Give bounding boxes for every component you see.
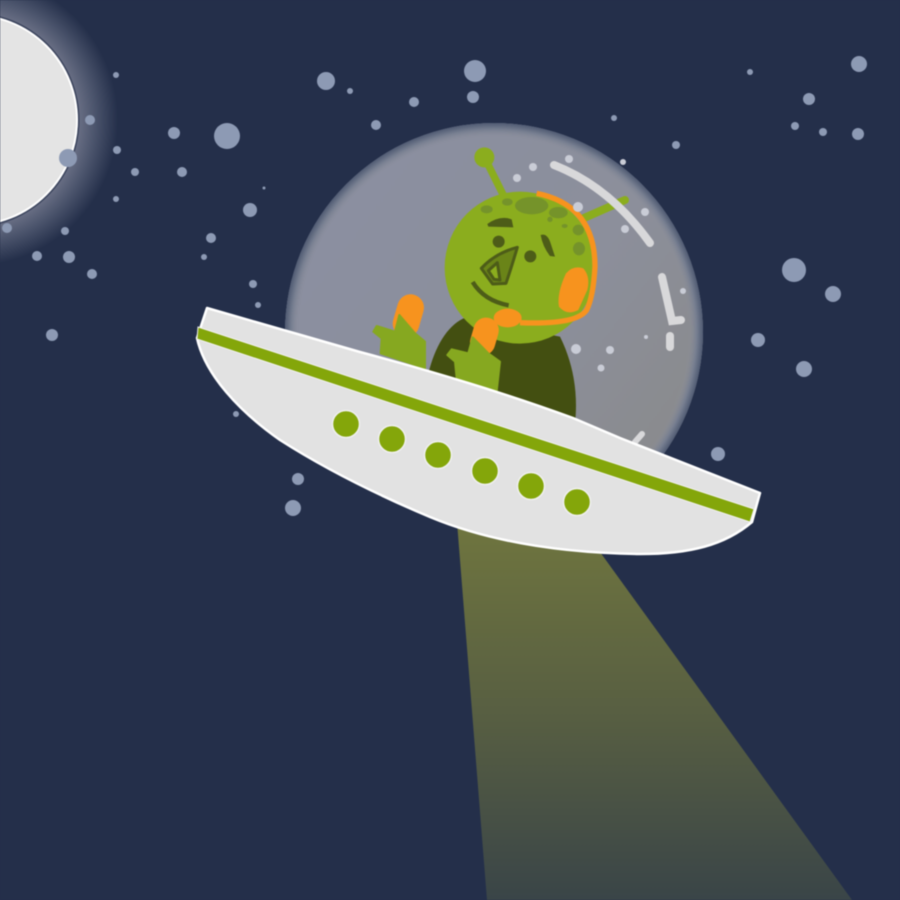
antennae: [474, 147, 625, 218]
head: [445, 192, 595, 344]
face: [473, 218, 555, 305]
hull: [197, 308, 760, 554]
body: [428, 318, 576, 423]
alien: [373, 147, 625, 423]
portholes: [332, 410, 590, 516]
back hand: [373, 291, 427, 368]
star over antenna: [573, 202, 583, 212]
stars: [2, 56, 867, 516]
dome highlights: [554, 165, 681, 442]
saucer: [197, 308, 760, 554]
headset: [494, 193, 595, 327]
green stripe: [197, 327, 754, 522]
dome stars: [513, 155, 686, 372]
moon: [0, 0, 118, 266]
glass dome: [284, 122, 704, 454]
light beam: [457, 522, 852, 900]
front hand: [447, 315, 502, 392]
head spots: [481, 197, 585, 255]
